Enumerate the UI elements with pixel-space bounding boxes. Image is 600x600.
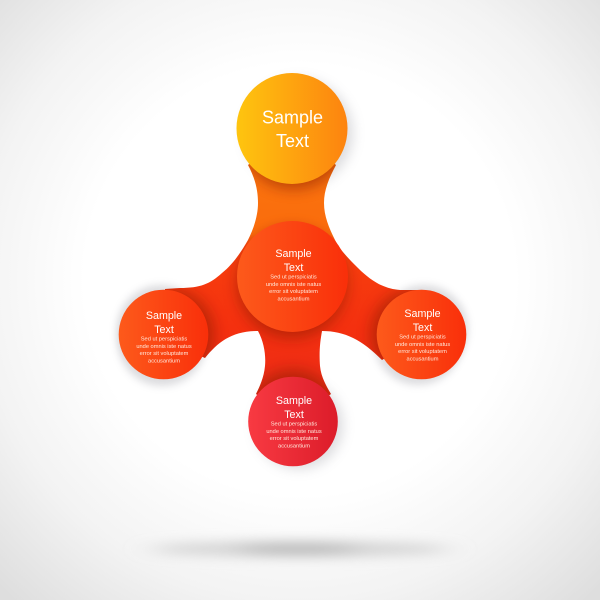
circle: bottom: Sample [276,395,312,407]
circle: bottom [248,377,338,466]
circle: left [119,290,208,379]
circle: right [377,290,466,379]
circle: top: Text [276,131,309,151]
circle: right: Text [413,322,432,334]
circle: bottom: unde omnis iste natus [266,429,322,435]
circle: bottom: Sed ut perspiciatis [271,422,317,428]
circle: bottom: accusantium [278,443,310,449]
circle: left: unde omnis iste natus [136,344,192,350]
circle: left: accusantium [148,358,180,364]
circle: center: Sed ut perspiciatis [270,274,317,280]
circle: left: Sample [146,310,182,322]
circle: top [236,73,348,184]
circle: center: error sit voluptatem [269,289,318,295]
floor shadow [150,541,450,557]
circle: center: unde omnis iste natus [266,282,321,288]
circle: center: Text [284,262,303,274]
circle: center: accusantium [278,296,310,302]
circle: left: Text [154,324,174,336]
circle: right: accusantium [407,356,439,362]
circle: right: unde omnis iste natus [395,342,450,348]
circle: center [237,221,348,332]
inner shadows from circles on the body [165,164,416,396]
soft shadows cast on the background [117,79,468,469]
circle: right: Sed ut perspiciatis [399,334,446,340]
circle: right: Sample [404,308,441,320]
circle: top: Sample [262,108,323,128]
circle: left: error sit voluptatem [140,351,189,357]
circle: bottom: error sit voluptatem [270,436,319,442]
circle: right: error sit voluptatem [398,349,447,355]
circle: bottom: Text [284,409,304,421]
circle: center: Sample [275,248,312,260]
circle: left: Sed ut perspiciatis [141,336,187,342]
metaball connector body [165,164,417,396]
